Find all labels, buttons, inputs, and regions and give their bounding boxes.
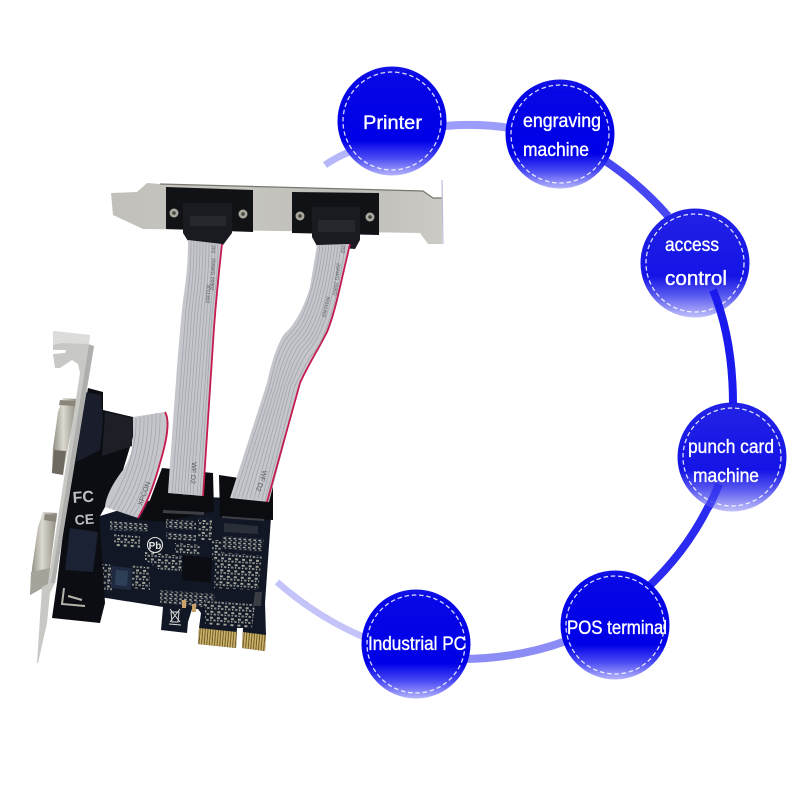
full-height bracket <box>37 331 94 663</box>
circle: access control: access <box>665 235 719 256</box>
circle: Printer: Printer <box>363 113 423 134</box>
Pb mark <box>148 538 162 552</box>
circle: engraving machine: machine <box>523 140 589 161</box>
circle: access control: control <box>665 268 727 290</box>
circuit board with chips and gold fingers <box>100 468 273 651</box>
ribbon cable 2: 20AWG 20802 <box>331 263 341 296</box>
circle: Industrial PC <box>362 590 470 698</box>
serial header body on full-height bracket: FC <box>72 489 95 507</box>
short ribbon cable <box>105 412 167 518</box>
ribbon cable 1: 202 <box>210 245 216 254</box>
header connectors <box>140 468 273 522</box>
Pb mark: Pb <box>149 541 161 552</box>
circle: punch card machine: punch card <box>688 437 774 458</box>
DB9 connectors <box>30 398 77 595</box>
connecting arc through application circles <box>277 125 716 659</box>
circle: engraving machine <box>506 80 614 188</box>
ribbon cable 1 <box>168 240 222 496</box>
circle: Printer <box>338 66 446 176</box>
ribbon cable 1: WF D2 <box>188 462 197 484</box>
recycling bin mark <box>169 609 181 625</box>
ribbon cable 1: 20AWG 20802 <box>208 258 216 291</box>
circle: access control <box>640 208 750 318</box>
ribbon cable 2 <box>230 244 350 502</box>
gold fingers <box>198 628 237 648</box>
circle: punch card machine <box>678 402 786 512</box>
serial header body on full-height bracket: CE <box>74 511 95 528</box>
circle: Industrial PC: Industrial PC <box>368 634 466 655</box>
serial header body on full-height bracket <box>52 388 133 623</box>
main controller chip <box>182 555 212 583</box>
short ribbon cable: XPCON <box>137 481 152 507</box>
ribbon cable 2: 202 <box>339 245 346 254</box>
circle: engraving machine: engraving <box>523 111 601 132</box>
ribbon cable 1: 3011302 <box>204 284 211 303</box>
low-profile bracket with two serial connectors <box>111 180 443 249</box>
circle: POS terminal: POS terminal <box>567 618 667 639</box>
arc overlap: access to punch card <box>708 290 733 508</box>
circle: POS terminal <box>560 570 670 680</box>
ribbon cable 2: WF D2 <box>254 469 268 492</box>
circle: punch card machine: machine <box>693 466 759 487</box>
ribbon cable 2: 30111302 <box>320 296 331 318</box>
surface-mount components <box>100 518 264 628</box>
